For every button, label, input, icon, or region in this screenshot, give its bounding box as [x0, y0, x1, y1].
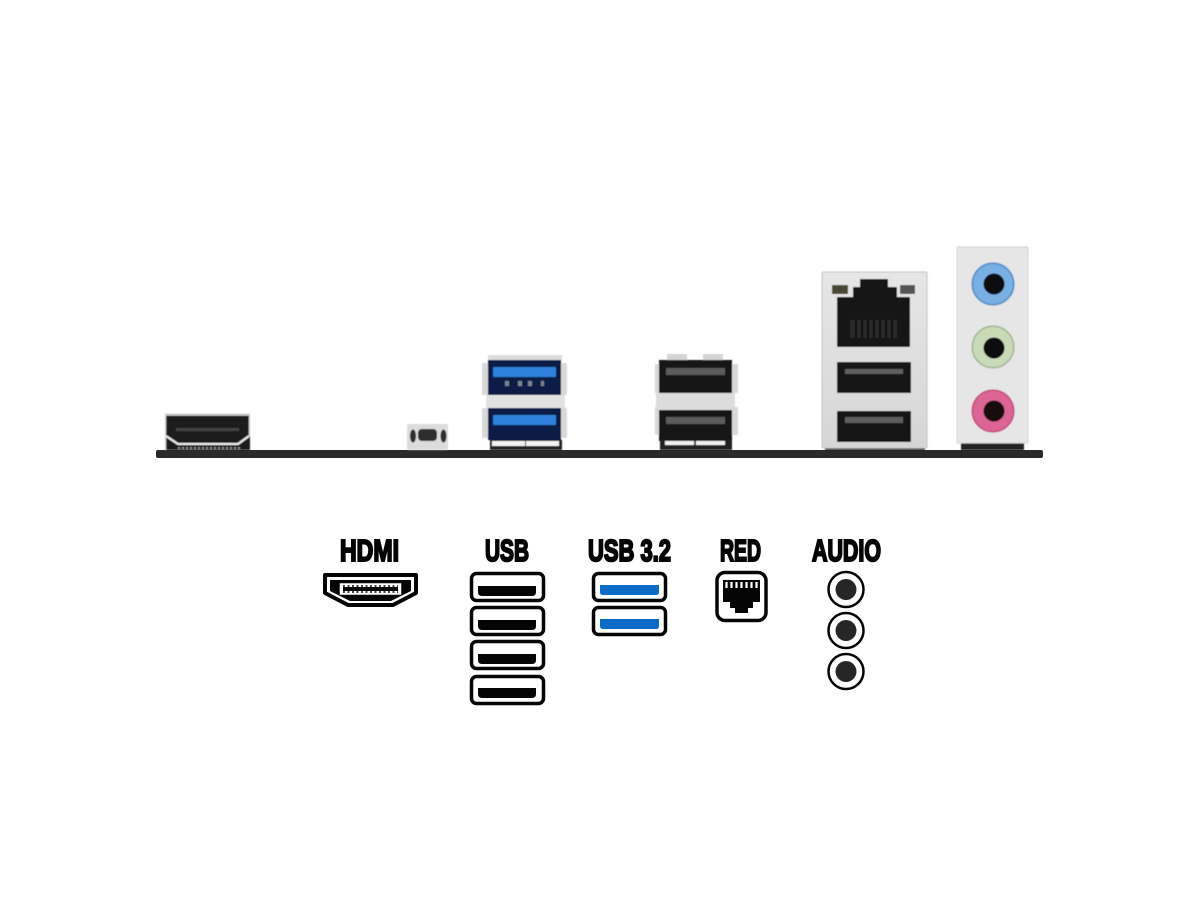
USB icon 4	[472, 676, 544, 704]
port: LAN with dual USB	[822, 272, 927, 450]
USB 3.2 icon 2	[594, 608, 666, 634]
rear panel board strip	[156, 450, 1043, 458]
port: stacked USB black	[655, 354, 738, 450]
audio icon 2	[828, 613, 864, 648]
label: RED: RED	[720, 533, 761, 568]
icon: USB 3.2 ports column	[594, 574, 666, 634]
USB port upper	[837, 362, 911, 393]
label: HDMI: HDMI	[340, 533, 399, 568]
jack: line out green	[972, 326, 1014, 368]
label: USB 3.2: USB 3.2	[588, 533, 671, 568]
icon: network port	[717, 572, 766, 620]
port: USB-C	[407, 424, 448, 450]
USB icon 3	[472, 642, 544, 668]
icon: USB ports column	[472, 574, 544, 704]
port: audio jacks	[957, 247, 1028, 450]
port: stacked USB 3.2 blue	[482, 355, 567, 450]
USB icon 2	[472, 608, 544, 634]
audio icon 3	[828, 654, 864, 689]
label: USB: USB	[485, 533, 529, 568]
icon: RJ45 socket	[837, 279, 910, 347]
audio icon 1	[828, 572, 864, 607]
USB port lower	[837, 411, 911, 442]
icon: HDMI	[325, 575, 416, 605]
jack: mic pink	[972, 390, 1014, 432]
port: HDMI	[165, 414, 250, 450]
jack: line in blue	[972, 263, 1014, 305]
label: AUDIO: AUDIO	[812, 533, 881, 568]
USB icon 1	[472, 574, 544, 600]
icon: audio jacks column	[828, 572, 864, 689]
USB 3.2 icon 1	[594, 574, 666, 600]
